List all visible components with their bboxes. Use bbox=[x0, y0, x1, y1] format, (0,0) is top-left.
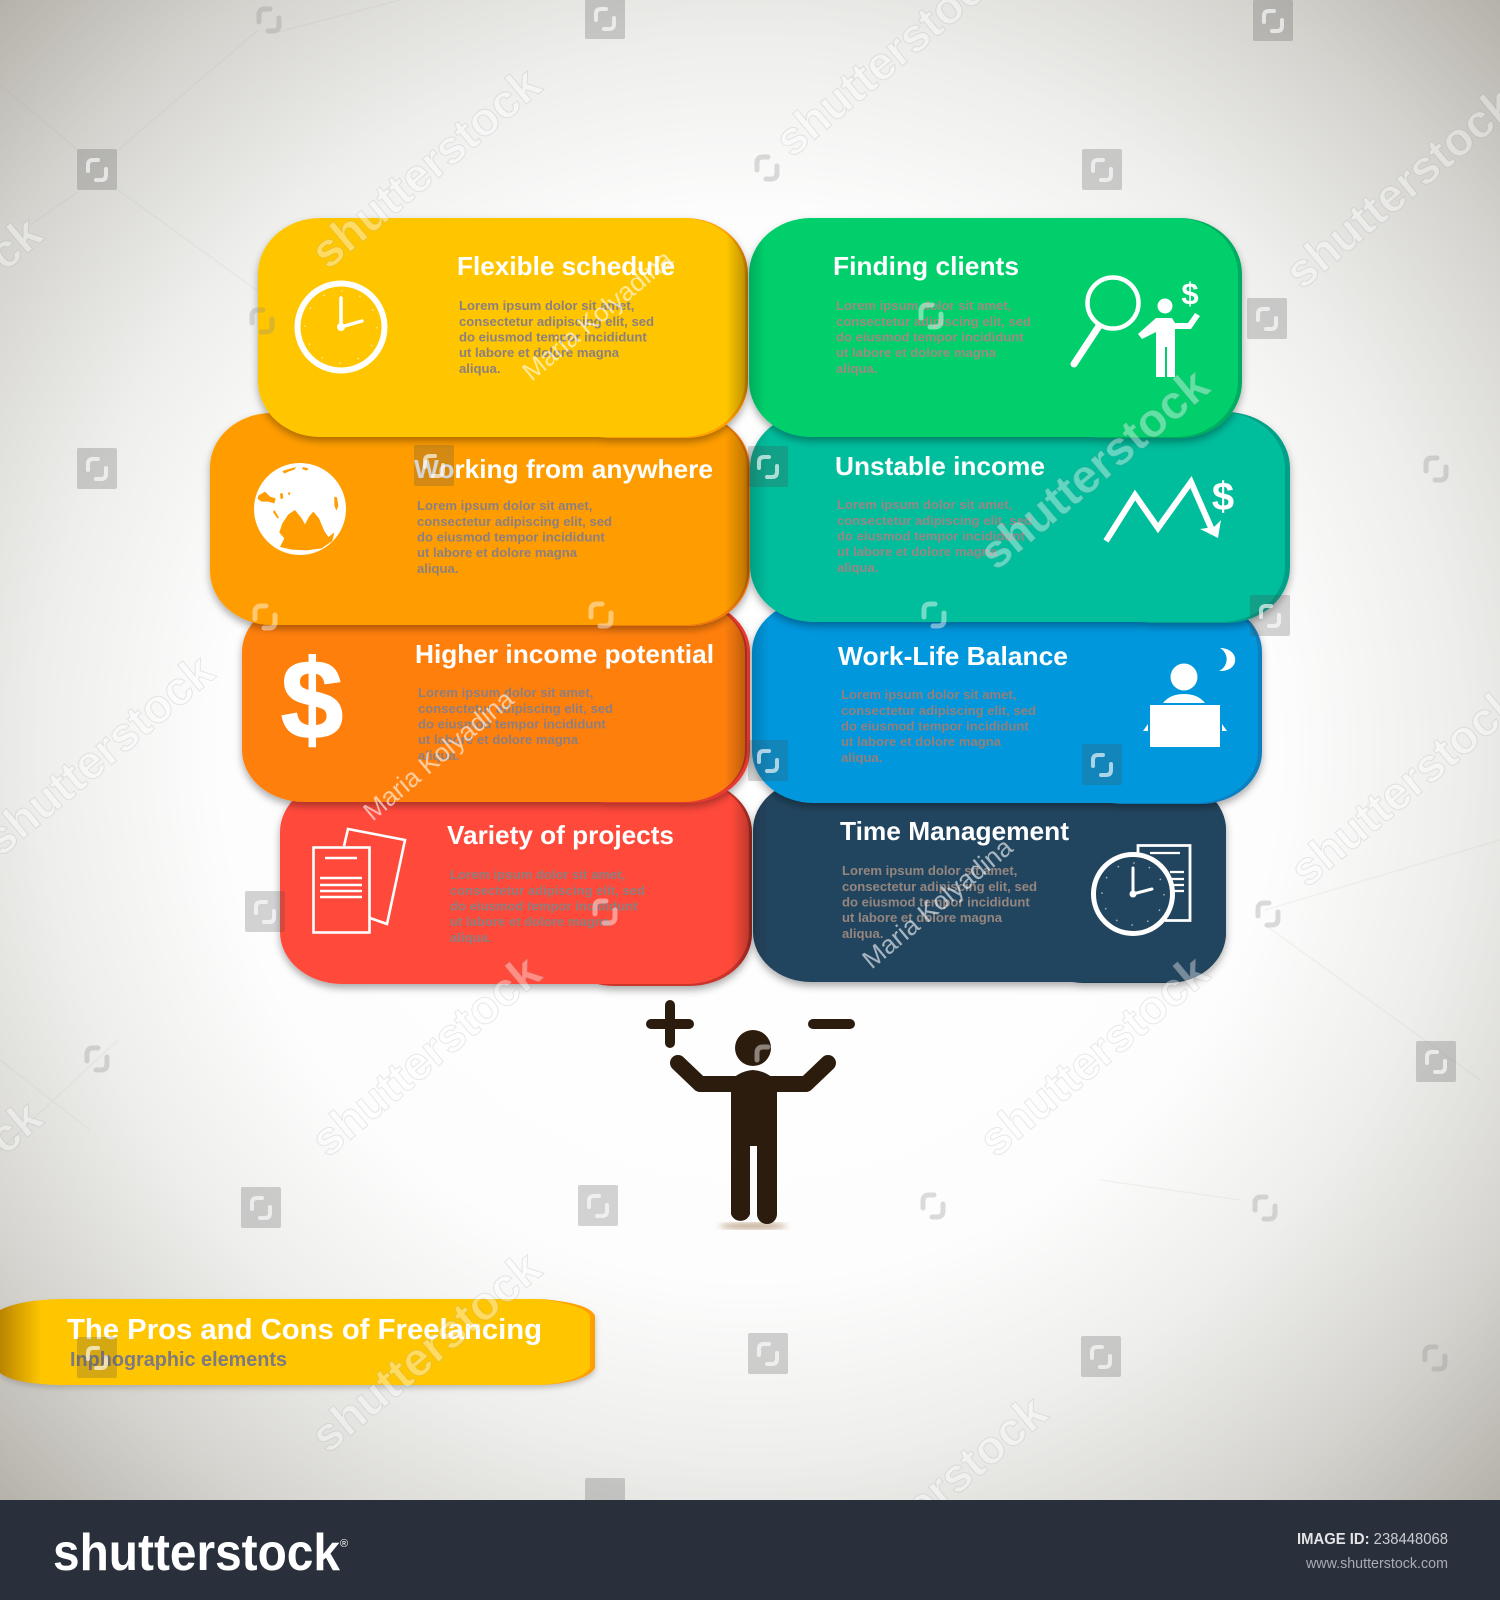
logo: registered mark: ® bbox=[340, 1538, 348, 1550]
heading: variety of projects: Variety of projects bbox=[447, 820, 674, 850]
text block: finding clients: ut labore et dolore magna bbox=[836, 345, 997, 360]
panel: finding clients bbox=[749, 218, 1242, 438]
text block: flexible schedule: Lorem ipsum dolor sit amet, bbox=[459, 298, 634, 313]
text block: time management: consectetur adipiscing elit, sed bbox=[842, 879, 1037, 894]
heading: time management: Time Management bbox=[840, 816, 1069, 846]
text block: flexible schedule: do eiusmod tempor incididunt bbox=[459, 330, 647, 344]
text block: work-life balance: consectetur adipiscing elit, sed bbox=[841, 703, 1036, 718]
text block: work-life balance: Lorem ipsum dolor sit amet, bbox=[841, 687, 1016, 702]
text block: work-life balance: aliqua. bbox=[841, 750, 882, 765]
text block: variety of projects bbox=[450, 867, 645, 945]
icon: magnifier and person: $ bbox=[1181, 276, 1199, 311]
heading: higher income potential: Higher income potential bbox=[415, 639, 714, 669]
watermark: shutterstock words: shutterstock bbox=[968, 944, 1219, 1166]
website: www.shutterstock.com bbox=[1305, 1556, 1448, 1572]
watermark grid lines bbox=[0, 0, 1500, 1200]
watermark: shutterstock words: shutterstock bbox=[806, 1384, 1057, 1600]
text block: time management bbox=[842, 863, 1037, 941]
text block: work-life balance: ut labore et dolore magna bbox=[841, 734, 1002, 749]
panel: time management bbox=[753, 780, 1226, 983]
text block: working from anywhere: aliqua. bbox=[417, 561, 458, 576]
icon: person at desk with moon bbox=[1143, 648, 1235, 747]
text block: finding clients: do eiusmod tempor incididunt bbox=[836, 330, 1024, 344]
text block: finding clients bbox=[836, 298, 1031, 376]
torso and legs bbox=[731, 1070, 777, 1224]
text block: variety of projects: consectetur adipiscing elit, sed bbox=[450, 883, 645, 898]
text block: flexible schedule: ut labore et dolore magna bbox=[459, 345, 620, 360]
text block: working from anywhere bbox=[417, 498, 612, 576]
text block: unstable income: Lorem ipsum dolor sit amet, bbox=[837, 497, 1012, 512]
text block: time management: ut labore et dolore magna bbox=[842, 910, 1003, 925]
icon: clock and document bbox=[1094, 846, 1190, 934]
icon: plus bbox=[651, 1005, 689, 1043]
icon: dollar: $ bbox=[281, 637, 343, 762]
panel: work-life balance bbox=[752, 600, 1262, 804]
heading: flexible schedule: Flexible schedule bbox=[457, 251, 675, 281]
watermark: small outline marks bbox=[87, 9, 1446, 1369]
text block: work-life balance bbox=[841, 687, 1036, 765]
icon: falling chart with dollar: $ bbox=[1212, 475, 1234, 519]
watermark: shutterstock words: Maria Kolyadina bbox=[856, 831, 1019, 975]
icon: clock bbox=[298, 284, 384, 370]
text block: higher income potential: ut labore et dolore magna bbox=[418, 732, 579, 747]
text block: finding clients: consectetur adipiscing elit, sed bbox=[836, 314, 1031, 329]
panel: variety of projects bbox=[280, 780, 752, 986]
text block: unstable income: ut labore et dolore magna bbox=[837, 544, 998, 559]
figure: person balancing plus and minus bbox=[651, 1005, 850, 1229]
panel: unstable income bbox=[750, 412, 1290, 623]
text block: variety of projects: Lorem ipsum dolor sit amet, bbox=[450, 867, 625, 882]
watermark: shutterstock words: shutterstock bbox=[968, 357, 1219, 579]
watermark: shutterstock words: shutterstock bbox=[300, 56, 551, 278]
watermark: shutterstock words: shutterstock bbox=[300, 1240, 551, 1462]
watermark: shutterstock words: Maria Kolyadina bbox=[357, 683, 520, 827]
panel: working from anywhere bbox=[210, 413, 750, 626]
text block: working from anywhere: consectetur adipiscing elit, sed bbox=[417, 514, 612, 529]
icon: documents bbox=[314, 829, 405, 932]
text block: unstable income: consectetur adipiscing elit, sed bbox=[837, 513, 1032, 528]
text block: higher income potential: consectetur adipiscing elit, sed bbox=[418, 701, 613, 716]
text block: flexible schedule bbox=[459, 298, 654, 376]
heading: title: The Pros and Cons of Freelancing bbox=[67, 1314, 542, 1346]
text block: variety of projects: do eiusmod tempor incididunt bbox=[450, 898, 638, 914]
text block: finding clients: aliqua. bbox=[836, 361, 877, 376]
watermark: shutterstock words: Maria Kolyadina bbox=[516, 243, 679, 387]
text block: unstable income: aliqua. bbox=[837, 560, 878, 575]
subtitle: Inphographic elements bbox=[70, 1349, 287, 1371]
text block: working from anywhere: ut labore et dolore magna bbox=[417, 545, 578, 560]
panel: higher income potential bbox=[242, 600, 750, 803]
text block: unstable income bbox=[837, 497, 1032, 575]
head bbox=[735, 1030, 771, 1066]
text block: flexible schedule: aliqua. bbox=[459, 361, 500, 376]
text block: higher income potential bbox=[418, 685, 613, 763]
text block: higher income potential: aliqua. bbox=[418, 748, 459, 763]
heading: working from anywhere: Working from anywhere bbox=[414, 454, 713, 484]
text block: work-life balance: do eiusmod tempor incididunt bbox=[841, 718, 1029, 734]
icon: magnifier and person bbox=[1074, 276, 1200, 377]
logo: shutterstock: shutterstock bbox=[53, 1524, 340, 1582]
panel: flexible schedule bbox=[258, 218, 748, 438]
footer bar bbox=[0, 1500, 1500, 1600]
text block: flexible schedule: consectetur adipiscing elit, sed bbox=[459, 314, 654, 329]
icon: globe bbox=[254, 463, 346, 555]
text block: working from anywhere: Lorem ipsum dolor sit amet, bbox=[417, 498, 592, 513]
heading: unstable income: Unstable income bbox=[835, 451, 1045, 481]
heading: work-life balance: Work-Life Balance bbox=[838, 641, 1068, 671]
image id: IMAGE ID: 238448068 bbox=[1297, 1531, 1448, 1548]
title banner bbox=[0, 1299, 595, 1388]
text block: higher income potential: do eiusmod tempor incididunt bbox=[418, 716, 606, 732]
text block: time management: aliqua. bbox=[842, 926, 883, 941]
icon: minus bbox=[813, 1019, 850, 1029]
text block: variety of projects: ut labore et dolore magna bbox=[450, 914, 611, 929]
text block: working from anywhere: do eiusmod tempor incididunt bbox=[417, 530, 605, 544]
text block: higher income potential: Lorem ipsum dolor sit amet, bbox=[418, 685, 593, 700]
body with raised arms bbox=[678, 1063, 828, 1084]
text block: time management: do eiusmod tempor incididunt bbox=[842, 894, 1030, 910]
text block: variety of projects: aliqua. bbox=[450, 930, 491, 945]
icon: falling chart with dollar bbox=[1106, 475, 1234, 541]
text block: time management: Lorem ipsum dolor sit amet, bbox=[842, 863, 1017, 878]
text block: finding clients: Lorem ipsum dolor sit amet, bbox=[836, 298, 1011, 313]
text block: unstable income: do eiusmod tempor incididunt bbox=[837, 528, 1025, 544]
watermark: shutterstock words: shutterstock bbox=[300, 944, 551, 1166]
heading: finding clients: Finding clients bbox=[833, 251, 1019, 281]
